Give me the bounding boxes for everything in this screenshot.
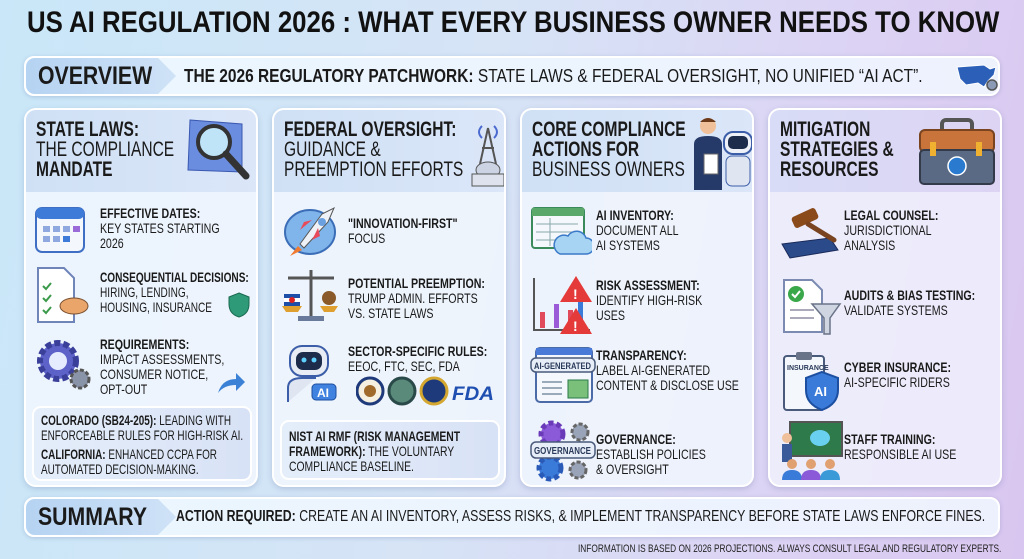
heading: state laws [36, 118, 174, 181]
panel: core compliance actions: CONTENT & DISCLOSE USE [596, 377, 739, 393]
panel: state laws: OPT-OUT [100, 381, 147, 397]
callout: colorado california [32, 406, 252, 481]
item: ai inventory [531, 207, 679, 255]
panel: mitigation strategies [768, 108, 1002, 487]
heading: mitigation [780, 118, 894, 181]
heading: state laws: THE COMPLIANCE [36, 138, 174, 161]
icon: shield [228, 292, 250, 318]
panel: mitigation strategies: RESPONSIBLE AI USE [844, 446, 956, 462]
footer note: INFORMATION IS BASED ON 2026 PROJECTIONS. ALWAYS CONSULT LEGAL AND REGULATORY EXPERTS. [578, 543, 1001, 555]
heading: federal oversight: PREEMPTION EFFORTS [284, 158, 463, 181]
panel: core compliance actions: ! [573, 286, 578, 302]
item: risk assessment [533, 276, 702, 334]
panel: mitigation strategies: STAFF TRAINING: [844, 431, 935, 447]
heading: federal oversight: FEDERAL OVERSIGHT: [284, 118, 456, 141]
panel: core compliance actions: TRANSPARENCY: [596, 347, 687, 363]
icon: capitol tower [472, 125, 504, 186]
icons: agency seals: FDA [452, 384, 494, 405]
icon: toolbox [919, 118, 995, 185]
panel: core compliance actions: ESTABLISH POLICIES [596, 446, 706, 462]
heading: core compliance actions [532, 118, 686, 181]
panel: state laws: REQUIREMENTS: [100, 336, 189, 352]
panel: state laws: CONSUMER NOTICE, [100, 366, 208, 382]
callout: colorado california: AUTOMATED DECISION-MAKING. [41, 461, 199, 477]
heading: mitigation: RESOURCES [780, 158, 878, 181]
panel: federal oversight: "INNOVATION-FIRST" [348, 215, 458, 231]
panel: core compliance actions: ! [573, 318, 578, 334]
item: staff training [782, 421, 956, 480]
heading: federal oversight: GUIDANCE & [284, 138, 381, 161]
panel: federal oversight: VS. STATE LAWS [348, 305, 434, 321]
panel: core compliance actions: AI INVENTORY: [596, 207, 674, 223]
heading: federal oversight [284, 118, 463, 181]
icon: person and robot [694, 118, 752, 190]
callout: colorado california: CALIFORNIA: ENHANCED CCPA FOR [41, 446, 217, 462]
callout: nist ai rmf [280, 420, 500, 480]
panel: core compliance actions: GOVERNANCE: [596, 431, 676, 447]
heading: state laws: STATE LAWS: [36, 118, 139, 141]
summary tag [26, 499, 176, 535]
panel: federal oversight: FOCUS [348, 230, 385, 246]
item: requirements [37, 336, 245, 397]
panel: core compliance actions [520, 108, 754, 487]
item: governance [530, 420, 706, 482]
heading: core compliance actions: CORE COMPLIANCE [532, 118, 686, 141]
title: US AI REGULATION 2026 : WHAT EVERY BUSINESS OWNER NEEDS TO KNOW [27, 6, 999, 39]
panel: state laws: CONSEQUENTIAL DECISIONS: [100, 269, 249, 285]
icon: us map [956, 64, 998, 91]
panel: federal oversight: TRUMP ADMIN. EFFORTS [348, 290, 478, 306]
overview bar [24, 56, 1000, 96]
item: audits [783, 279, 975, 335]
panel: federal oversight [272, 108, 506, 487]
panel: federal oversight: AI [317, 386, 329, 400]
panel: core compliance actions: DOCUMENT ALL [596, 222, 679, 238]
panel: federal oversight: POTENTIAL PREEMPTION: [348, 275, 485, 291]
heading: state laws: MANDATE [36, 158, 113, 181]
item: cyber insurance [783, 352, 951, 412]
panel: mitigation strategies: AUDITS & BIAS TESTING: [844, 287, 975, 303]
panel: core compliance actions: IDENTIFY HIGH-RISK [596, 292, 702, 308]
callout: nist ai rmf: NIST AI RMF (RISK MANAGEMENT [289, 428, 460, 444]
panel: state laws: HIRING, LENDING, [100, 284, 188, 300]
panel: mitigation strategies: ANALYSIS [844, 237, 895, 253]
panel: mitigation strategies: CYBER INSURANCE: [844, 359, 951, 375]
panel: federal oversight: SECTOR-SPECIFIC RULES: [348, 343, 487, 359]
panel: mitigation strategies: LEGAL COUNSEL: [844, 207, 938, 223]
item: effective dates [35, 205, 220, 253]
icon: arrow [218, 373, 245, 393]
panel: state laws: 2026 [100, 235, 124, 251]
item: sector specific rules [287, 343, 494, 406]
callout: nist ai rmf: COMPLIANCE BASELINE. [289, 458, 414, 474]
panel: core compliance actions: LABEL AI-GENERATED [596, 362, 710, 378]
item: legal counsel [781, 207, 938, 258]
item: potential preemption [282, 270, 485, 321]
overview tag [26, 58, 176, 94]
panel: mitigation strategies: AI [814, 384, 827, 399]
heading: core compliance actions: BUSINESS OWNERS [532, 158, 685, 181]
heading: mitigation: STRATEGIES & [780, 138, 894, 161]
panel: core compliance actions: RISK ASSESSMENT: [596, 277, 700, 293]
icons: agency seals [356, 376, 494, 406]
overview text: THE 2026 REGULATORY PATCHWORK: STATE LAWS & FEDERAL OVERSIGHT, NO UNIFIED “AI ACT”. [184, 66, 923, 86]
panel: mitigation strategies: VALIDATE SYSTEMS [844, 302, 948, 318]
callout: colorado california: COLORADO (SB24-205): LEADING WITH [41, 412, 231, 428]
panel: mitigation strategies: JURISDICTIONAL [844, 222, 931, 238]
panel: federal oversight: EEOC, FTC, SEC, FDA [348, 358, 460, 374]
icon: magnifier map [188, 120, 250, 180]
panel: core compliance actions: AI SYSTEMS [596, 237, 660, 253]
panel: state laws: EFFECTIVE DATES: [100, 205, 200, 221]
panel: mitigation strategies: INSURANCE [787, 365, 829, 372]
panel: core compliance actions: USES [596, 307, 625, 323]
panel: state laws: HOUSING, INSURANCE [100, 299, 212, 315]
item: innovation first [284, 207, 458, 256]
summary tag: SUMMARY [38, 503, 147, 531]
panel: mitigation strategies: AI-SPECIFIC RIDERS [844, 374, 950, 390]
item: transparency [530, 347, 739, 403]
panel: state laws [24, 108, 258, 487]
heading: mitigation: MITIGATION [780, 118, 870, 141]
panel: core compliance actions: & OVERSIGHT [596, 461, 669, 477]
overview tag: OVERVIEW [38, 62, 152, 90]
panel: state laws: IMPACT ASSESSMENTS, [100, 351, 224, 367]
summary bar [24, 497, 1000, 537]
summary text: ACTION REQUIRED: CREATE AN AI INVENTORY, ASSESS RISKS, & IMPLEMENT TRANSPARENCY BEFORE STATE LAWS ENFORCE FINES. [176, 508, 985, 525]
heading: core compliance actions: ACTIONS FOR [532, 138, 639, 161]
callout: colorado california: ENFORCEABLE RULES FOR HIGH-RISK AI. [41, 427, 243, 443]
panel: state laws: KEY STATES STARTING [100, 220, 220, 236]
callout: nist ai rmf: FRAMEWORK): THE VOLUNTARY [289, 443, 454, 459]
item: consequential decisions [37, 267, 250, 323]
